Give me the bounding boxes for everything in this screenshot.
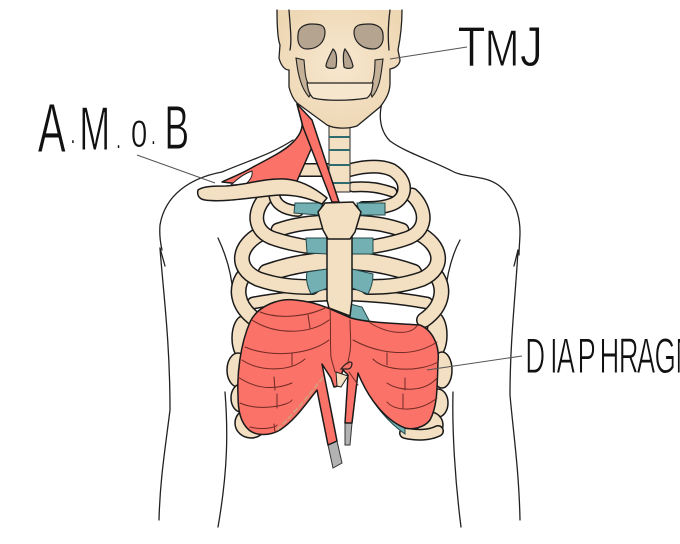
neck vertebrae — [329, 124, 350, 192]
body outline — [159, 103, 520, 527]
label: A.M.o.B: . — [151, 121, 156, 150]
A.M.o.B pointer — [137, 155, 215, 183]
sternocleidomastoid strap — [297, 104, 339, 202]
teeth — [307, 83, 373, 100]
label: A.M.o.B: M — [79, 94, 110, 163]
nose — [326, 49, 337, 68]
crura gray tendons — [328, 441, 342, 468]
diaphragm pointer — [427, 356, 522, 370]
skull — [277, 10, 402, 128]
label: A.M.o.B: B — [164, 93, 189, 162]
label: A.M.o.B: . — [116, 125, 121, 154]
cranium and jaw — [277, 10, 402, 128]
sternum — [318, 202, 361, 316]
diaphragm — [238, 300, 438, 468]
notch — [336, 372, 348, 387]
muscle — [238, 300, 438, 445]
neck muscle — [222, 104, 312, 185]
anterior ribs — [239, 167, 441, 320]
posterior ribs — [253, 170, 427, 303]
label: A.M.o.B: A — [38, 90, 66, 168]
label: TMJ: T — [458, 14, 485, 78]
jaw hollows — [296, 58, 311, 97]
label: A.M.o.B: . — [71, 120, 75, 149]
TMJ pointer — [390, 47, 467, 59]
clavicle — [198, 179, 327, 204]
gap in muscle — [231, 171, 252, 185]
label: TMJ: J — [520, 14, 543, 78]
costal cartilage — [294, 203, 385, 324]
label: A.M.o.B: o — [131, 102, 147, 158]
rib cage — [227, 167, 452, 438]
muscle fibres — [238, 307, 438, 432]
label: TMJ: M — [485, 19, 519, 77]
eye sockets — [298, 24, 325, 49]
lower rib bumps — [227, 313, 452, 438]
central opening — [341, 362, 352, 369]
teal edge — [358, 373, 405, 434]
